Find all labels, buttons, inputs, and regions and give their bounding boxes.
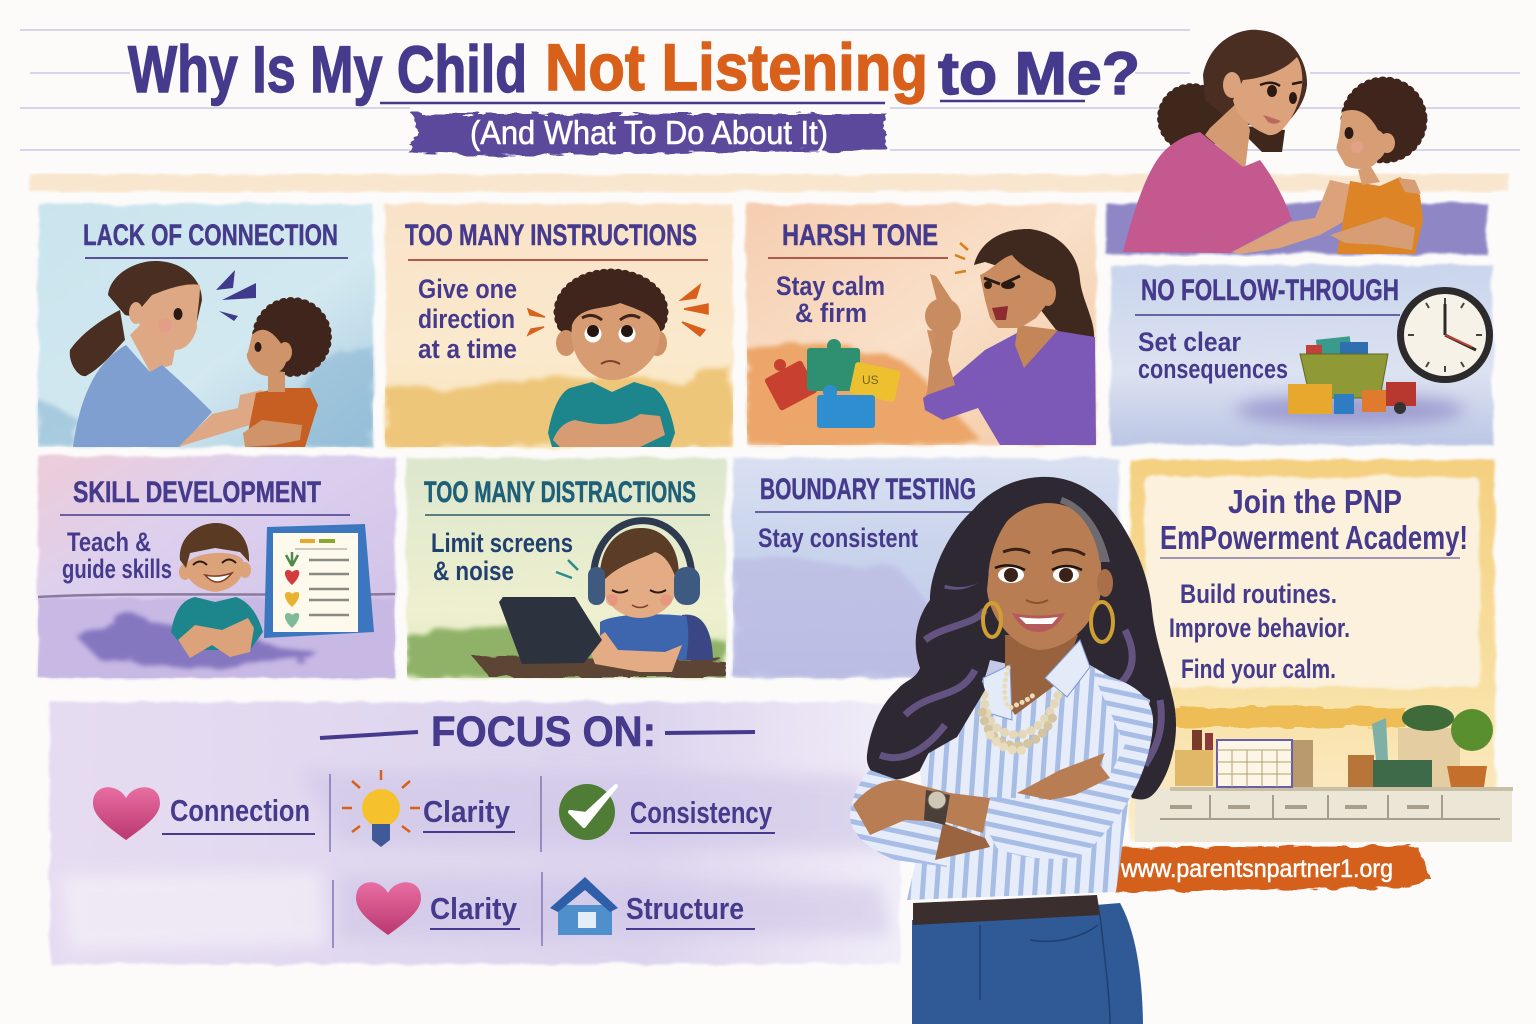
ear bbox=[1097, 569, 1113, 597]
item: clarity with heart: Clarity bbox=[430, 891, 518, 926]
heading: TOO MANY INSTRUCTIONS bbox=[405, 219, 697, 252]
darker wash bbox=[300, 770, 900, 940]
panel: too many instructions: direction bbox=[418, 304, 515, 334]
floor shadow bbox=[80, 620, 320, 665]
puzzle pieces bbox=[764, 339, 901, 428]
title: Not Listening bbox=[545, 30, 928, 104]
heading: TOO MANY DISTRACTIONS bbox=[424, 476, 696, 509]
hair highlights bbox=[880, 555, 1161, 765]
underline bbox=[85, 257, 348, 259]
body text: Build routines. bbox=[1180, 579, 1337, 609]
body text: Give one bbox=[418, 274, 517, 304]
item: connection: Connection bbox=[170, 793, 310, 828]
motion marks bbox=[216, 270, 256, 321]
left sleeve bbox=[850, 770, 947, 867]
subtitle banner: (And What To Do About It) bbox=[470, 114, 828, 151]
panel: harsh tone bbox=[747, 204, 1096, 445]
underline bbox=[408, 259, 708, 261]
belt bbox=[913, 895, 1100, 925]
presenter woman bbox=[850, 477, 1176, 1024]
puzzle label: US bbox=[862, 373, 879, 387]
smile bbox=[1012, 613, 1065, 632]
body text: Stay calm bbox=[776, 271, 885, 301]
heading: LACK OF CONNECTION bbox=[83, 219, 338, 252]
hair front lobe bbox=[880, 660, 985, 777]
website banner: www.parentsnpartner1.org bbox=[1120, 855, 1393, 883]
earrings bbox=[983, 602, 1113, 642]
shirt torso bbox=[907, 665, 1150, 900]
item: clarity with heart bbox=[356, 882, 520, 935]
panel: too many instructions bbox=[385, 204, 733, 447]
peach divider band bbox=[30, 174, 1510, 192]
item: consistency bbox=[559, 784, 775, 840]
item: consistency: Consistency bbox=[630, 795, 773, 830]
clock bbox=[1397, 287, 1493, 383]
collar bbox=[983, 640, 1090, 720]
small pearl necklace bbox=[1005, 668, 1036, 708]
shout marks bbox=[955, 243, 968, 273]
body text: Teach & bbox=[67, 527, 151, 557]
body text: Limit screens bbox=[431, 528, 573, 558]
heading: SKILL DEVELOPMENT bbox=[73, 476, 321, 509]
pearl necklace bbox=[982, 695, 1058, 750]
tablet bbox=[499, 597, 602, 664]
item: clarity with bulb: Clarity bbox=[423, 794, 511, 829]
panel: academy call to action bbox=[1100, 460, 1513, 892]
green ground wash bbox=[407, 628, 726, 678]
stress marks bbox=[528, 285, 708, 336]
left hand and forearm bbox=[853, 780, 990, 835]
website banner bbox=[1100, 846, 1432, 892]
neck and chest bbox=[1005, 635, 1078, 715]
purple wash bbox=[733, 556, 928, 678]
toy basket bbox=[1288, 336, 1416, 414]
boy figure bbox=[548, 274, 675, 447]
panel: too many instructions: at a time bbox=[418, 334, 517, 364]
panel: academy call to action: Find your calm. bbox=[1181, 654, 1336, 684]
underline bbox=[1135, 314, 1400, 316]
heading: NO FOLLOW-THROUGH bbox=[1141, 274, 1399, 307]
desk scene bbox=[1135, 705, 1513, 842]
title: to Me? bbox=[938, 40, 1140, 107]
item: structure bbox=[550, 877, 755, 935]
heading rule bbox=[1160, 557, 1460, 559]
panel: harsh tone: & firm bbox=[795, 298, 867, 328]
dividers bbox=[330, 774, 542, 948]
panel: lack of connection bbox=[38, 204, 373, 447]
lower wash bbox=[38, 598, 395, 678]
hair back bbox=[867, 477, 1176, 800]
watch bbox=[924, 790, 950, 825]
panel: no follow-through: consequences bbox=[1138, 354, 1288, 384]
right hand bbox=[1017, 753, 1110, 800]
item: connection bbox=[93, 787, 315, 840]
shadow bbox=[1235, 394, 1465, 426]
orange ground wash bbox=[747, 345, 985, 445]
heading: FOCUS ON: bbox=[431, 708, 656, 756]
underline bbox=[768, 257, 948, 259]
panel: too many distractions bbox=[407, 458, 726, 678]
right sleeve bbox=[983, 672, 1153, 859]
cream card bbox=[1146, 476, 1480, 688]
panel: boundary testing bbox=[733, 458, 1118, 678]
shaved side bbox=[1060, 497, 1110, 562]
boy figure bbox=[171, 523, 263, 658]
panel: skill development: guide skills bbox=[62, 554, 172, 584]
mother bbox=[1123, 30, 1355, 254]
item: structure: Structure bbox=[626, 891, 744, 926]
heading: BOUNDARY TESTING bbox=[760, 473, 976, 506]
header rule lines bbox=[20, 30, 1520, 150]
body text: Set clear bbox=[1138, 327, 1241, 357]
hair side swoop bbox=[935, 482, 1040, 587]
title: Why Is My Child bbox=[128, 32, 527, 106]
title bbox=[128, 30, 1140, 107]
item: clarity with bulb bbox=[342, 770, 515, 847]
boy figure bbox=[243, 302, 327, 447]
gold wash bbox=[385, 368, 733, 447]
pale wash bbox=[60, 870, 325, 950]
panel: focus on bbox=[50, 702, 900, 964]
table bbox=[472, 656, 726, 678]
angry mother bbox=[923, 229, 1096, 445]
noise marks bbox=[556, 560, 578, 578]
panel: no follow-through bbox=[1110, 265, 1493, 445]
underline bbox=[425, 514, 710, 516]
body text: Stay consistent bbox=[758, 523, 918, 553]
lower forearm bbox=[935, 823, 990, 860]
nose bbox=[1026, 600, 1048, 603]
eyes bbox=[995, 549, 1085, 583]
horizon line bbox=[38, 594, 395, 597]
white halo bbox=[905, 895, 1146, 1024]
underline bbox=[60, 514, 350, 516]
heading bbox=[320, 708, 755, 756]
underline bbox=[755, 511, 975, 513]
panel: too many distractions: & noise bbox=[433, 556, 514, 586]
heading: HARSH TONE bbox=[782, 219, 938, 252]
boy with headphones bbox=[588, 521, 713, 672]
boy bbox=[1330, 82, 1423, 254]
panel: academy call to action: Improve behavior. bbox=[1169, 613, 1350, 643]
illustration: mother and child top right bbox=[1106, 30, 1487, 254]
heading: Join the PNP bbox=[1228, 483, 1402, 520]
purple strip bbox=[1106, 203, 1487, 254]
mother figure bbox=[70, 261, 266, 447]
checklist board bbox=[264, 524, 374, 638]
jeans seams bbox=[980, 915, 1110, 1024]
watercolor wash bbox=[38, 345, 373, 447]
face bbox=[987, 503, 1102, 650]
jeans bbox=[912, 903, 1143, 1024]
panel: skill development bbox=[38, 456, 395, 678]
